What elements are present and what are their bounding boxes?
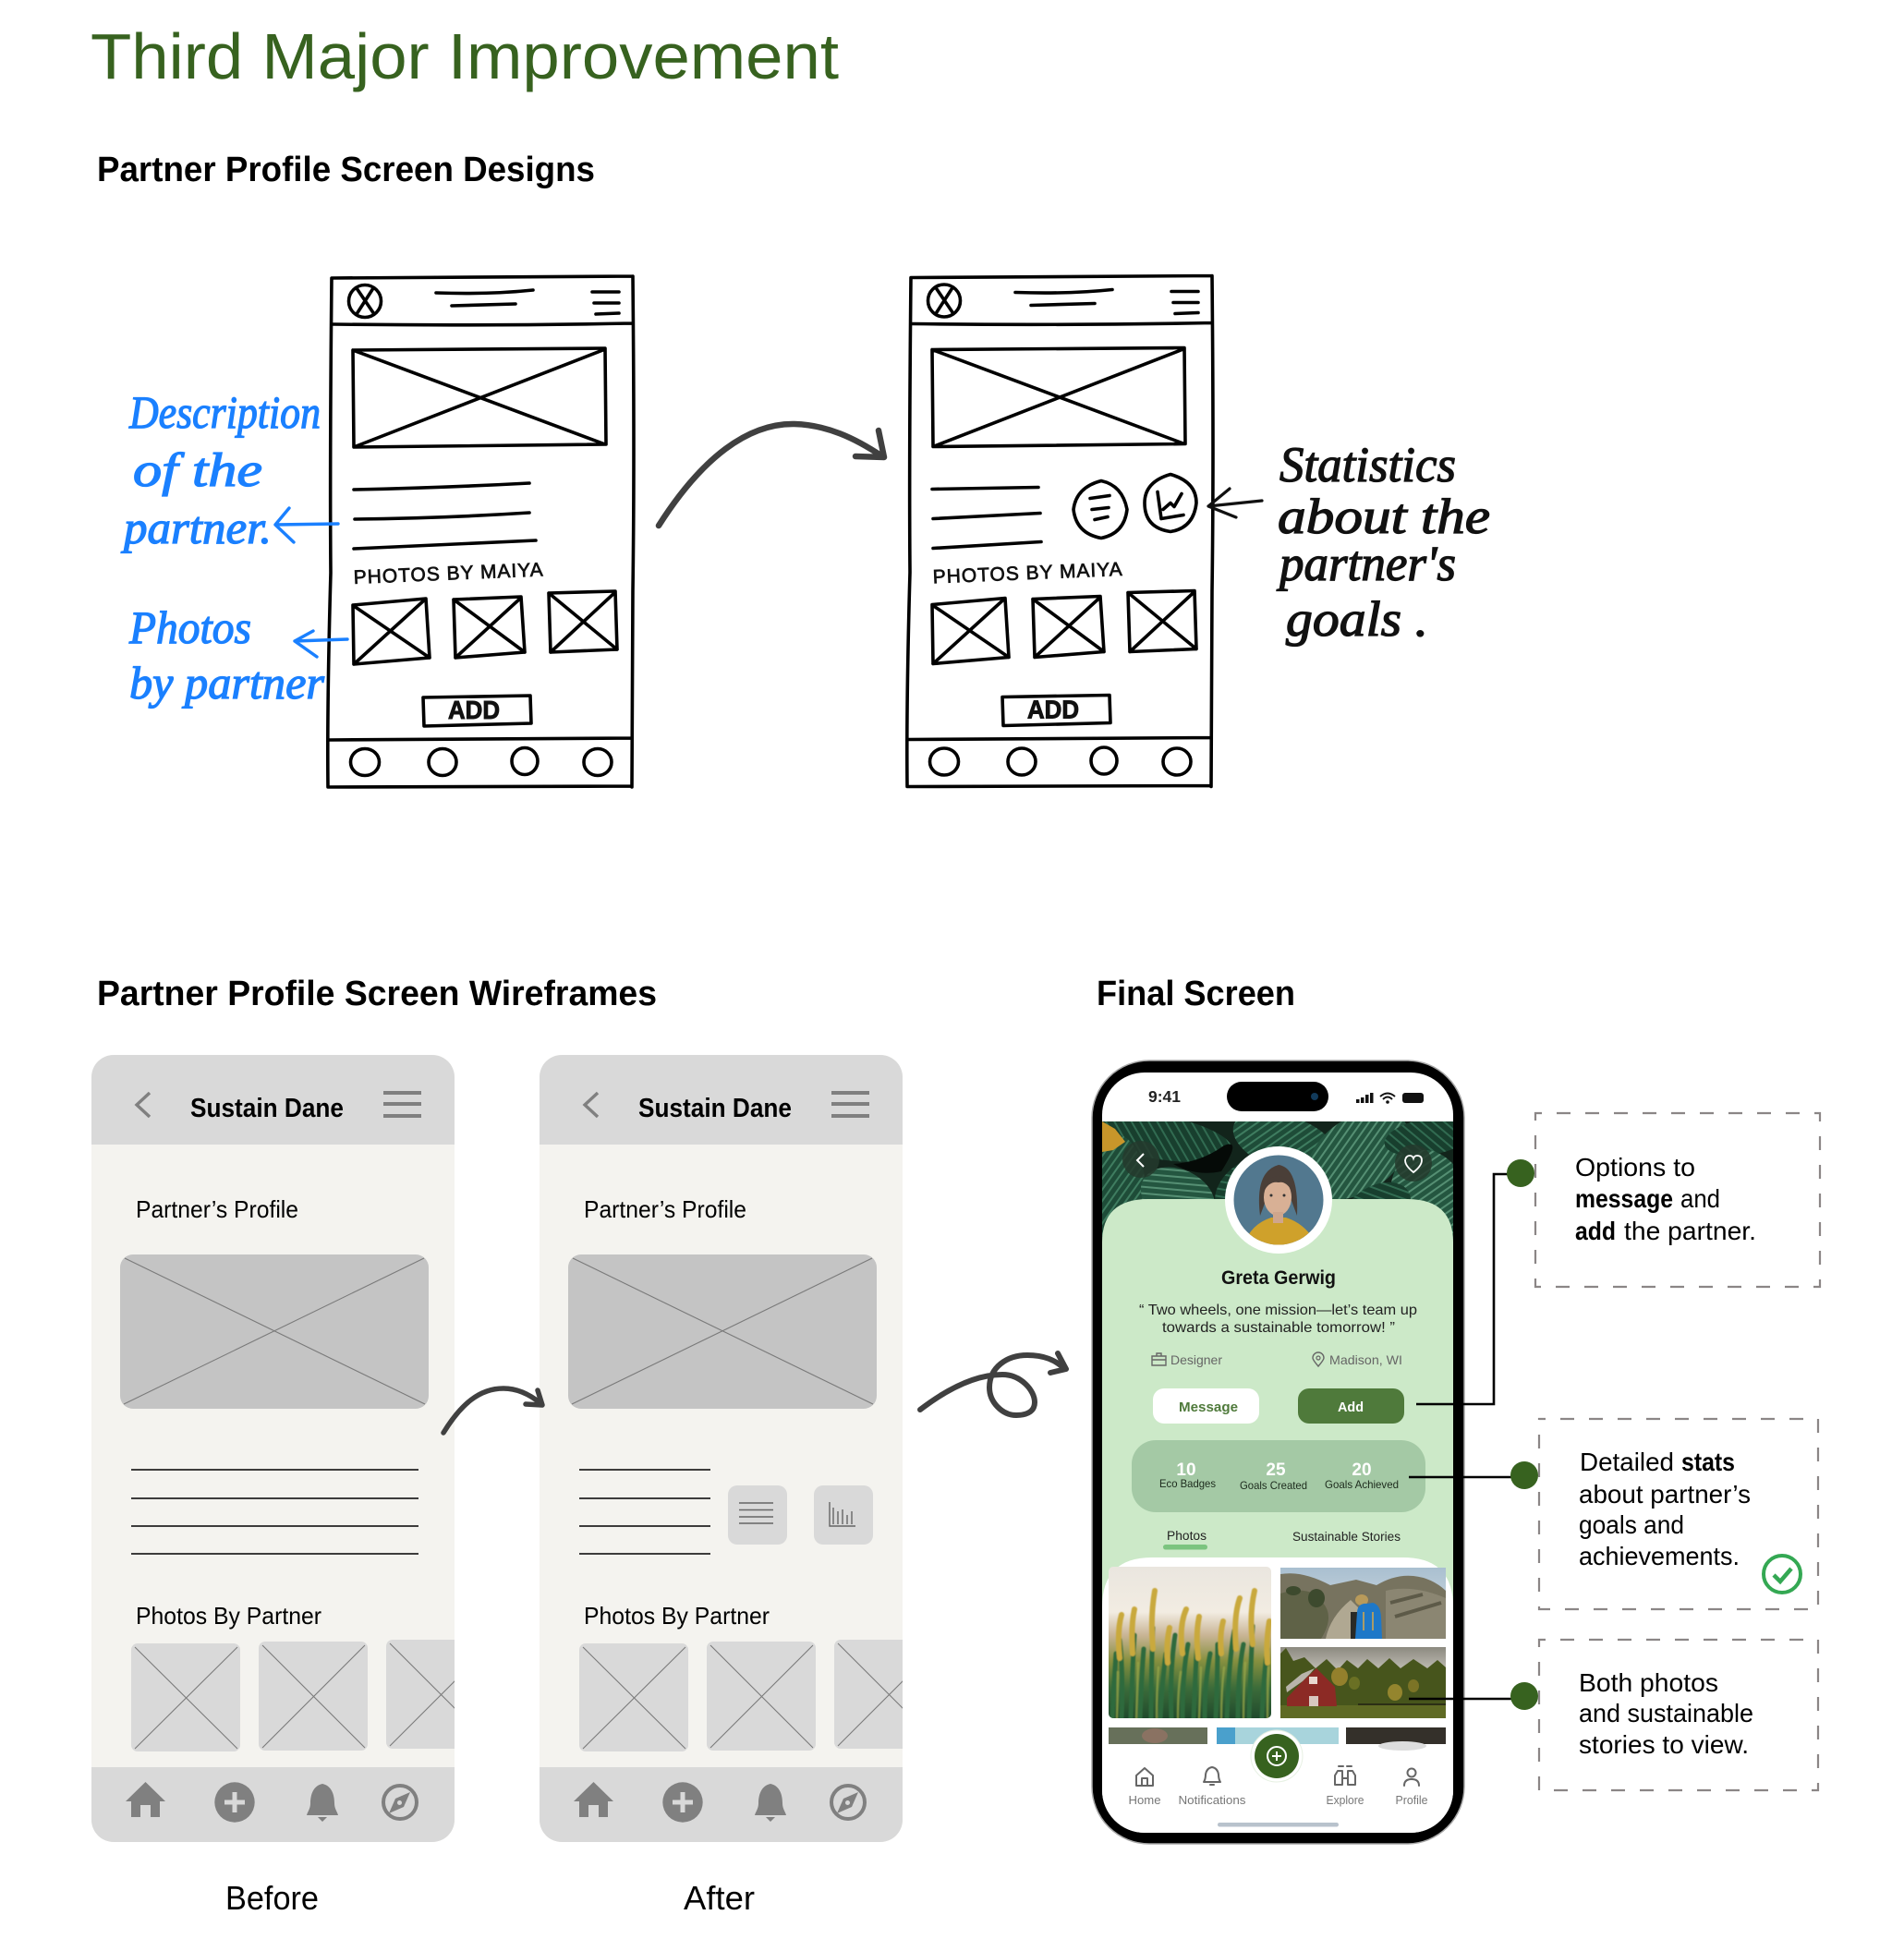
navigation bar: Explore [1327, 1794, 1364, 1807]
callout: photos and stories: Both photos [1579, 1668, 1718, 1697]
annotation: statistics about the partner's goals: goals . [1286, 591, 1428, 647]
annotation: statistics about the partner's goals: partner's [1276, 536, 1456, 591]
stats panel [1132, 1440, 1425, 1512]
tabs: Photos [1167, 1529, 1207, 1543]
sketch: before design: PHOTOS BY MAIYA [353, 559, 543, 588]
stats panel: Goals Achieved [1325, 1478, 1399, 1491]
callout: stats: stats [1681, 1448, 1735, 1476]
connector: stats [1409, 1476, 1524, 1478]
sketch: after design [907, 275, 1213, 787]
callout: stats: about partner’s [1579, 1480, 1751, 1509]
navigation bar [1129, 1766, 1428, 1807]
button: add: Add [1338, 1400, 1364, 1415]
wireframe: before: Partner’s Profile [136, 1195, 298, 1223]
button: add floating [1251, 1730, 1303, 1782]
sketch: before design: ADD [448, 696, 500, 724]
photo strip: partial row [1109, 1727, 1446, 1751]
meta: role and location: Designer [1170, 1352, 1222, 1367]
callout: photos and stories [1510, 1640, 1818, 1790]
callout: options: the partner. [1624, 1217, 1756, 1245]
wireframe: before [91, 1055, 492, 1842]
meta: role and location [1152, 1352, 1402, 1367]
callout: options [1507, 1113, 1820, 1287]
title: Third Major Improvement [91, 20, 839, 92]
tabs [1163, 1529, 1401, 1550]
sketch: after design: PHOTOS BY MAIYA [932, 559, 1122, 588]
status bar: 9:41 [1148, 1087, 1181, 1106]
arrow: before to after sketch [659, 424, 884, 526]
callout: options: add [1575, 1217, 1616, 1245]
callout: options: message [1575, 1184, 1673, 1213]
profile quote [1140, 1304, 1417, 1332]
callout: stats: Detailed [1580, 1448, 1674, 1476]
heading: partner profile screen designs: Partner Profile Screen Designs [97, 151, 595, 189]
annotation: description of the partner: Description [128, 386, 321, 438]
caption: before: Before [225, 1879, 319, 1917]
tabs: Sustainable Stories [1292, 1530, 1401, 1544]
button: message: Message [1179, 1400, 1238, 1415]
wireframe: after: Partner’s Profile [584, 1195, 746, 1223]
connector: message and add [1416, 1174, 1521, 1404]
phone: final screen [1073, 1060, 1481, 1844]
annotation: description of the partner [121, 386, 321, 553]
navigation bar: Home [1129, 1794, 1161, 1807]
annotation: photos by partner: by partner [129, 657, 325, 709]
stats panel: 10 [1176, 1460, 1196, 1480]
photo: leaf background [1102, 1121, 1453, 1242]
callout: stats [1510, 1419, 1818, 1609]
navigation bar: Notifications [1179, 1794, 1245, 1807]
annotation: description of the partner: partner. [121, 502, 272, 553]
annotation: photos by partner [128, 601, 325, 709]
annotation: statistics about the partner's goals [1276, 437, 1490, 647]
arrow: to photos [295, 631, 347, 657]
arrow: to description [275, 508, 338, 542]
wireframe: after: Sustain Dane [638, 1094, 792, 1123]
caption: after: After [684, 1879, 755, 1917]
button: favourite [1395, 1145, 1432, 1182]
card: profile [1102, 1199, 1453, 1607]
sketch: before design [328, 276, 634, 787]
photo: hiker [1280, 1568, 1446, 1639]
connector: photos [1409, 1698, 1524, 1700]
profile quote: “ Two wheels, one mission—let’s team up [1139, 1303, 1417, 1318]
meta: role and location: Madison, WI [1329, 1352, 1402, 1367]
avatar: partner portrait [1225, 1146, 1332, 1254]
sheet: photo gallery [1102, 1557, 1453, 1833]
callout: stats: goals and [1579, 1510, 1684, 1539]
annotation: statistics about the partner's goals: Statistics [1279, 437, 1456, 492]
navigation bar: Profile [1395, 1794, 1428, 1807]
wireframe: after [540, 1055, 940, 1842]
button: back [1122, 1141, 1159, 1178]
callout: photos and stories: stories to view. [1579, 1730, 1749, 1759]
sketch: after design: ADD [1027, 695, 1079, 724]
callout: options: and [1680, 1184, 1720, 1213]
arrow: squiggle to final screen [920, 1353, 1066, 1415]
arrow: from statistics note [1208, 489, 1262, 517]
annotation: photos by partner: Photos [128, 601, 251, 653]
wireframe: after: Photos By Partner [584, 1602, 770, 1630]
button: message [1153, 1388, 1259, 1424]
profile name: Greta Gerwig [1221, 1267, 1336, 1289]
photo: wheat field [1109, 1567, 1271, 1718]
arrow: wireframe before to after [443, 1388, 542, 1433]
photo: red barn [1280, 1647, 1446, 1718]
stats panel: 20 [1352, 1460, 1372, 1480]
stats panel: Eco Badges [1159, 1477, 1216, 1490]
profile quote: towards a sustainable tomorrow! ” [1162, 1320, 1395, 1336]
wireframe: before: Photos By Partner [136, 1602, 321, 1630]
wireframe: before: Sustain Dane [190, 1094, 344, 1123]
callout: options: Options to [1575, 1153, 1695, 1182]
heading: final screen: Final Screen [1097, 975, 1295, 1013]
button: add [1298, 1388, 1404, 1424]
callout: photos and stories: and sustainable [1579, 1699, 1753, 1727]
annotation: statistics about the partner's goals: about the [1278, 489, 1490, 544]
heading: wireframes: Partner Profile Screen Wireframes [97, 975, 657, 1013]
annotation: description of the partner: of the [133, 444, 262, 497]
stats panel: Goals Created [1240, 1479, 1307, 1492]
status bar [1148, 1082, 1424, 1111]
home indicator [1218, 1823, 1339, 1827]
icon: check badge [1764, 1556, 1801, 1593]
stats panel: 25 [1266, 1460, 1286, 1480]
callout: stats: achievements. [1579, 1542, 1740, 1570]
